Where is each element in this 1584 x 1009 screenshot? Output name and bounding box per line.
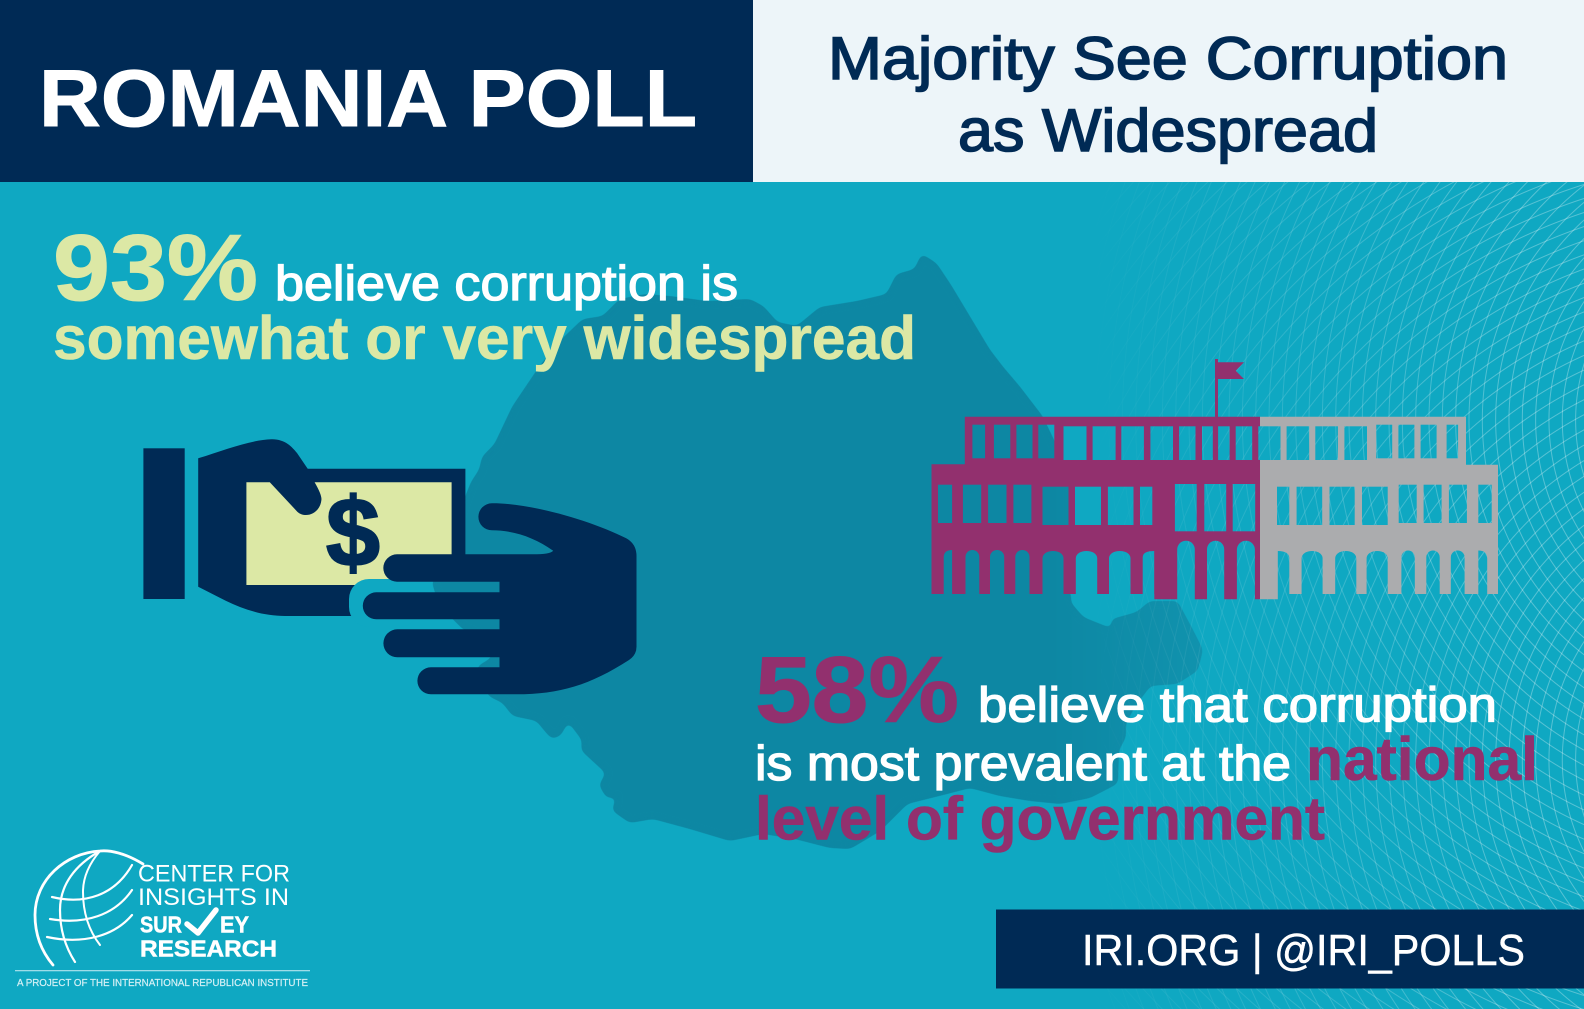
logo: Center for Insights in Survey Research xyxy=(15,851,310,989)
stat block: 58 percent: believe that corruption xyxy=(978,679,1497,733)
icon: giving hand holding bill xyxy=(198,439,465,616)
icon: receiving hand xyxy=(363,503,636,694)
logo wordmark: bold lines: RESEARCH xyxy=(140,936,277,962)
building: purple share xyxy=(932,417,1260,599)
stat block: 58 percent: is most prevalent at the xyxy=(755,737,1291,791)
stat block: 58 percent: national xyxy=(1306,725,1538,793)
stat block: 58 percent: level of government xyxy=(755,784,1325,852)
icon: sleeve cuff xyxy=(143,448,185,599)
title: ROMANIA POLL xyxy=(39,54,697,144)
decorative moire line pattern xyxy=(1090,182,1584,1009)
logo wordmark: light lines xyxy=(138,861,290,911)
footer links: IRI.ORG | @IRI_POLLS xyxy=(1082,926,1525,975)
subtitle: Majority See Corruption xyxy=(828,25,1508,92)
stat block: 93 percent: believe corruption is xyxy=(275,257,738,311)
icon: hands exchanging money xyxy=(143,439,636,694)
stat block: 93 percent: 93% xyxy=(53,215,258,320)
stat block: 93 percent: somewhat or very widespread xyxy=(53,304,916,372)
icon: dollar sign: $ xyxy=(326,478,380,587)
logo wordmark: light lines: INSIGHTS IN xyxy=(138,884,289,911)
logo wordmark: bold lines xyxy=(140,912,277,962)
icon: gap around finger xyxy=(349,579,419,627)
map of Romania silhouette xyxy=(433,255,1202,848)
logo wordmark: light lines: CENTER FOR xyxy=(138,861,290,888)
icon: check mark xyxy=(187,910,216,933)
icon: banknote xyxy=(246,482,452,585)
subtitle: as Widespread xyxy=(958,97,1378,164)
icon: globe xyxy=(35,851,143,965)
header: subtitle panel xyxy=(753,0,1584,182)
stat block: 58 percent xyxy=(755,637,1538,852)
stat block: 58 percent: 58% xyxy=(755,637,959,742)
building: gray share xyxy=(1260,417,1498,599)
footer bar xyxy=(996,910,1584,988)
icon: flag xyxy=(1215,359,1244,417)
stat block: 93 percent xyxy=(53,215,916,372)
icon: government building xyxy=(932,359,1498,599)
logo wordmark: bold lines: EY xyxy=(220,912,249,938)
logo tagline: A PROJECT OF THE INTERNATIONAL REPUBLICAN INSTITUTE xyxy=(17,978,308,989)
header: navy title panel xyxy=(0,0,753,182)
logo wordmark: bold lines: SUR xyxy=(140,912,182,938)
subtitle xyxy=(828,25,1508,164)
